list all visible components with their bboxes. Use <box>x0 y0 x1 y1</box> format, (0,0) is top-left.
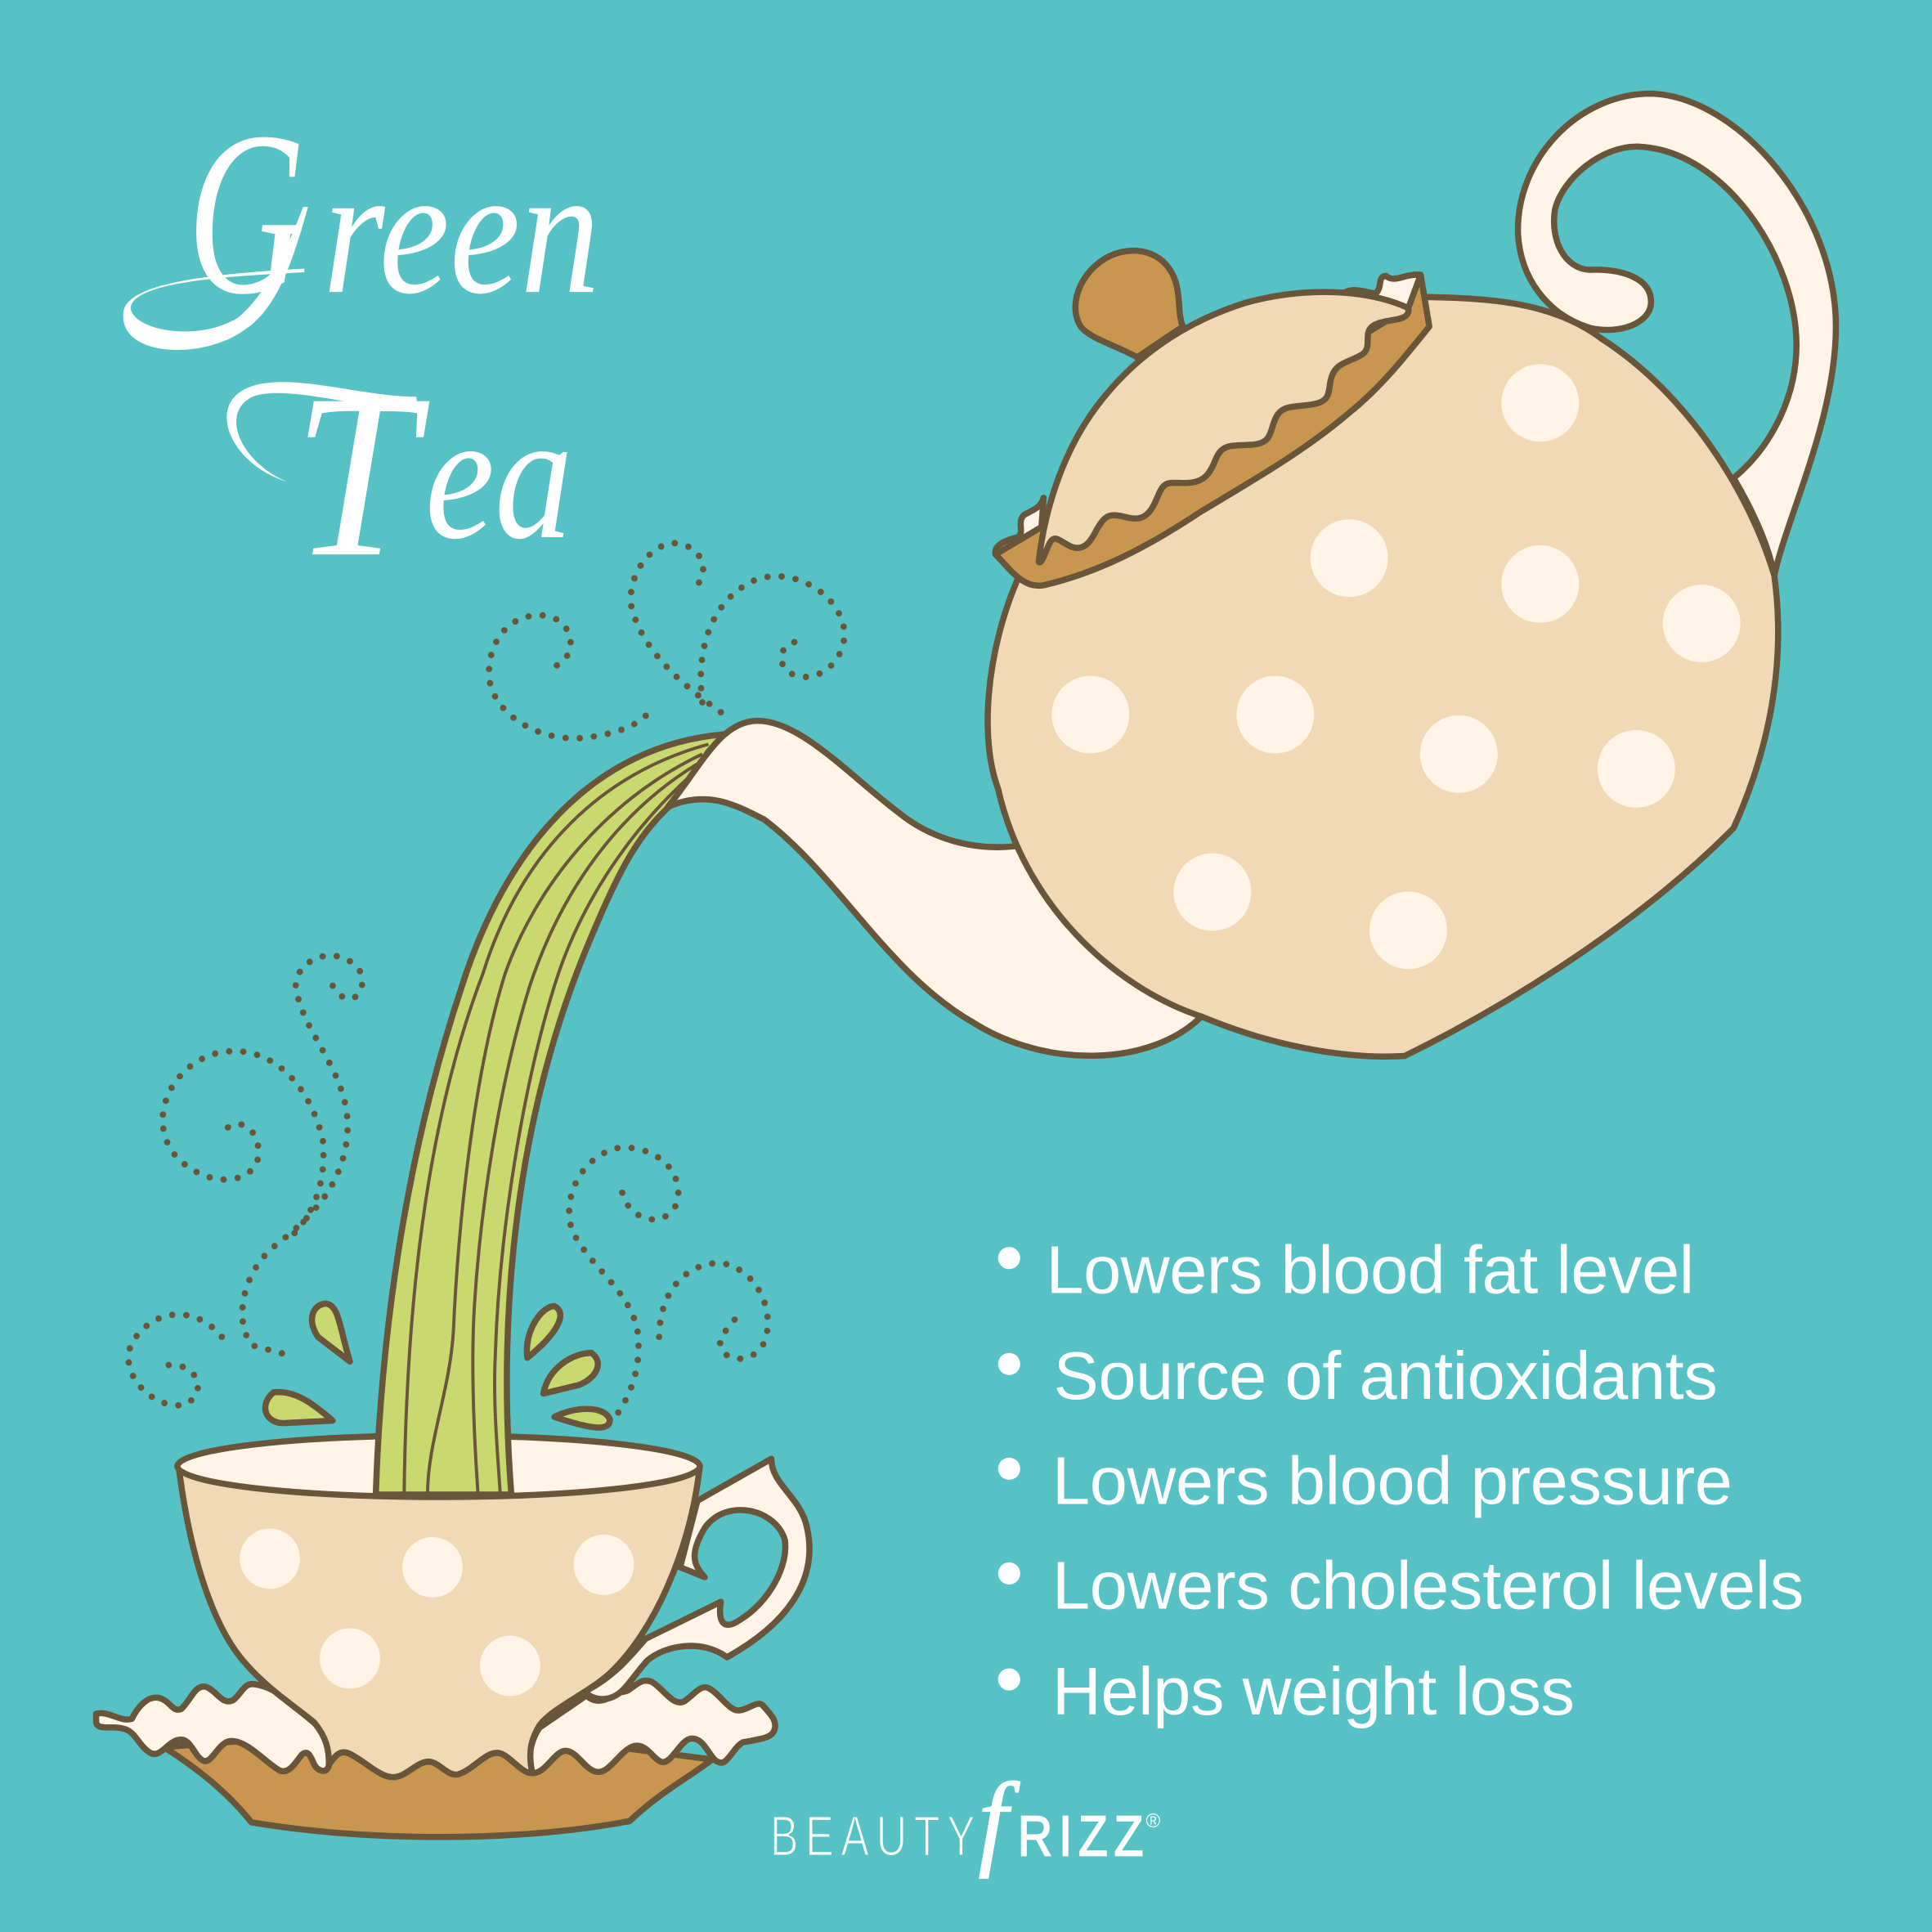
teapot <box>376 94 1836 1495</box>
title word: Tea <box>226 346 573 605</box>
logo: BeautyFrizz: f <box>979 1763 1020 1880</box>
cup handle <box>586 1459 809 1699</box>
droplet 5 <box>554 1409 610 1428</box>
title word: Tea: T <box>294 346 432 605</box>
teapot body <box>988 297 1778 1056</box>
benefit 4: Lowers cholesterol levels <box>1052 1547 1804 1623</box>
teapot polka dots <box>1051 364 1741 969</box>
droplet 3 <box>527 1306 560 1358</box>
tea droplets <box>265 1303 610 1428</box>
title word: Green <box>123 83 600 350</box>
benefit 2: Source of antioxidants <box>1053 1338 1718 1414</box>
logo: BeautyFrizz: RIZZ <box>1018 1804 1144 1868</box>
title word: Tea: ea <box>425 375 573 577</box>
logo: BeautyFrizz: ® <box>1146 1810 1161 1832</box>
teapot handle <box>1518 94 1836 576</box>
cup polka dots <box>240 1528 634 1696</box>
benefit 1: Lowers blood fat level <box>1046 1232 1694 1308</box>
teapot lid knob <box>1075 251 1183 357</box>
saucer base <box>164 1725 712 1837</box>
logo: BeautyFrizz <box>770 1763 1161 1880</box>
benefits list <box>998 1232 1804 1729</box>
benefit 3: Lowers blood pressure <box>1052 1442 1733 1518</box>
cup body <box>179 1466 700 1777</box>
cup rim <box>177 1436 700 1497</box>
logo: BeautyFrizz: BEAUTY <box>770 1804 975 1867</box>
title word: Green: G <box>187 83 306 343</box>
saucer left frill <box>96 1684 329 1771</box>
droplet 2 <box>265 1392 333 1423</box>
steam swirls near spout <box>489 543 845 738</box>
teacup and saucer <box>93 1417 813 1840</box>
teapot lid <box>995 275 1429 585</box>
title word: Green: reen <box>323 130 600 332</box>
steam swirls above cup <box>128 956 768 1419</box>
teapot spout <box>668 721 1201 1056</box>
title: Green Tea <box>123 83 600 605</box>
benefit 5: Helps weight loss <box>1052 1653 1575 1729</box>
tea stream entering cup <box>373 1417 514 1495</box>
tea stream <box>376 734 724 1495</box>
droplet 1 <box>312 1303 350 1361</box>
saucer right frill <box>527 1681 775 1773</box>
droplet 4 <box>544 1353 598 1393</box>
